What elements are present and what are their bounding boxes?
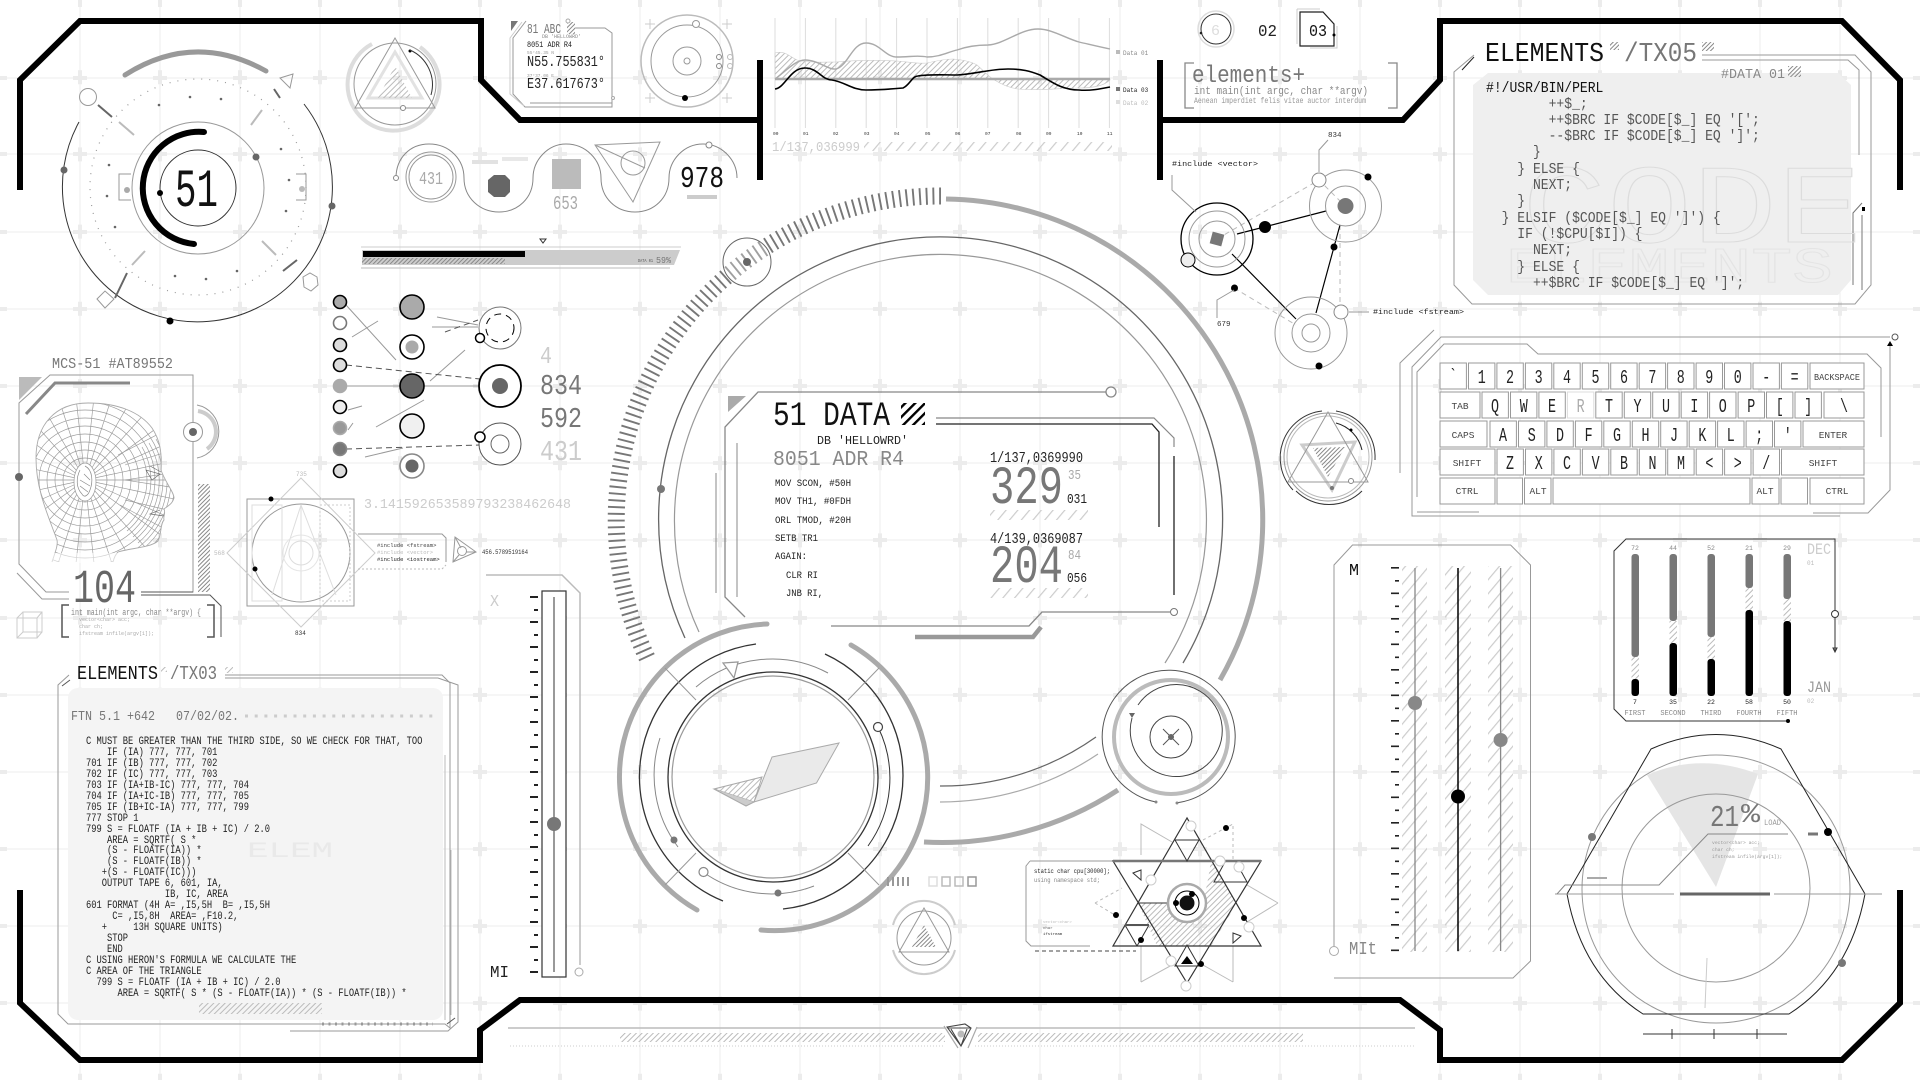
keys row 4: SHIFT bbox=[1809, 458, 1838, 469]
keys row 1 bbox=[1440, 363, 1864, 389]
perl listing: --$BRC IF $CODE[$_] EQ ']'; bbox=[1486, 128, 1760, 145]
step counter circles: 03 bbox=[1309, 23, 1327, 42]
slider panel M to MIt bbox=[1330, 545, 1530, 978]
code panel TX05: #DATA 01 bbox=[1721, 67, 1785, 83]
load value: 21 bbox=[1710, 801, 1739, 836]
keys row 5: CTRL bbox=[1826, 486, 1849, 497]
code listing: +(S - FLOATF(IC))) bbox=[86, 866, 196, 878]
head scan panel: int main(int argc, char **argv) { bbox=[71, 608, 201, 618]
heading TX05: ELEMENTS bbox=[1485, 40, 1604, 70]
coordinates box: 55°45.35 N bbox=[527, 50, 554, 56]
bar chart DEC to JAN: FIRST bbox=[1624, 710, 1646, 718]
value 431: 431 bbox=[419, 170, 443, 190]
code note box: char bbox=[1043, 926, 1053, 931]
code listing: C USING HERON'S FORMULA WE CALCULATE THE bbox=[86, 954, 296, 966]
bar chart DEC to JAN: 72 bbox=[1631, 545, 1639, 552]
triangle icon centre right bbox=[1280, 411, 1375, 505]
keyboard bbox=[1400, 330, 1898, 516]
slider panel M to MIt: MIt bbox=[1349, 940, 1377, 960]
network diagram bbox=[1172, 132, 1465, 370]
code note box: ifstream bbox=[1043, 932, 1063, 937]
keys row 3: F bbox=[1585, 425, 1593, 447]
keys row 3: K bbox=[1698, 425, 1707, 447]
step counter circles bbox=[1198, 9, 1337, 48]
network diagram: 679 bbox=[1217, 321, 1231, 329]
code listing: IF (IA) 777, 777, 701 bbox=[86, 746, 217, 758]
code panel TX03 bbox=[58, 663, 458, 1031]
coordinates box: DB 'HELLOWRD' bbox=[542, 34, 581, 40]
code listing: + 13H SQUARE UNITS) bbox=[86, 921, 223, 933]
keys row 2: I bbox=[1690, 396, 1698, 418]
compass square schematic: 834 bbox=[295, 630, 306, 637]
bar chart DEC to JAN: 35 bbox=[1669, 699, 1677, 706]
axis labels: 09 bbox=[1046, 131, 1052, 137]
keys row 2: O bbox=[1719, 396, 1727, 418]
perl listing: ++$BRC IF $CODE[$_] EQ '['; bbox=[1486, 112, 1760, 129]
readout numbers: 4 bbox=[540, 344, 552, 371]
keys row 2: R bbox=[1577, 396, 1585, 418]
thick frame: top left bbox=[20, 21, 760, 190]
bar chart DEC to JAN: 7 bbox=[1633, 699, 1637, 706]
code listing: 777 STOP 1 bbox=[86, 812, 139, 824]
perl listing: NEXT; bbox=[1486, 177, 1572, 194]
progress bar 59% bbox=[361, 239, 681, 268]
axis labels: 05 bbox=[925, 131, 931, 137]
keys row 4: SHIFT bbox=[1453, 458, 1482, 469]
perl listing: } bbox=[1486, 193, 1525, 210]
code note box: using namespace std; bbox=[1034, 877, 1100, 884]
keys row 2: [ bbox=[1776, 396, 1784, 418]
keys row 3: A bbox=[1499, 425, 1507, 447]
keys row 4: C bbox=[1563, 453, 1571, 475]
keys row 1: 5 bbox=[1592, 367, 1600, 389]
keys row 3: J bbox=[1670, 425, 1678, 447]
coordinates box bbox=[510, 19, 614, 107]
keys row 3: ENTER bbox=[1819, 430, 1848, 441]
bottom centre rule with gem icon bbox=[508, 1024, 1415, 1048]
keys row 1: BACKSPACE bbox=[1814, 372, 1860, 383]
line chart: 1/137,036999 bbox=[772, 140, 860, 156]
keys row 4: M bbox=[1677, 453, 1685, 475]
heading TX03: ELEMENTS bbox=[77, 663, 158, 685]
perl listing bbox=[1486, 80, 1760, 292]
keys row 4: / bbox=[1762, 453, 1770, 475]
keys row 1: 9 bbox=[1705, 367, 1713, 389]
hatched area bbox=[775, 52, 1110, 90]
coordinates box: 81 ABC bbox=[527, 22, 561, 38]
series: data 01 bbox=[775, 29, 1110, 79]
triangle marker with value bbox=[453, 537, 528, 562]
keys row 2: W bbox=[1520, 396, 1528, 418]
elements+ caption bbox=[1185, 63, 1397, 108]
line chart bbox=[772, 18, 1149, 156]
readout 329: 1/137,0369990 bbox=[990, 450, 1083, 467]
bar chart DEC to JAN: 01 bbox=[1807, 560, 1815, 567]
keys row 2 bbox=[1440, 392, 1864, 418]
perl listing: } ELSIF ($CODE[$_] EQ ']') { bbox=[1486, 210, 1721, 227]
slider panel M to MIt: M bbox=[1349, 562, 1359, 581]
elements+ caption: Aenean imperdiet felis vitae auctor interdum bbox=[1194, 97, 1366, 106]
bar chart DEC to JAN: 29 bbox=[1783, 545, 1791, 552]
keys row 2: U bbox=[1662, 396, 1670, 418]
readout 329: 35 bbox=[1068, 468, 1081, 484]
perl listing: } ELSE { bbox=[1486, 161, 1580, 178]
thick frame: top right bbox=[1160, 21, 1900, 190]
icon: wireframe head bbox=[36, 402, 174, 563]
keys row 1: 2 bbox=[1506, 367, 1514, 389]
keys row 2: E bbox=[1548, 396, 1556, 418]
keys row 1: - bbox=[1762, 367, 1770, 389]
code listing: 701 IF (IB) 777, 777, 702 bbox=[86, 757, 217, 769]
elements+ caption: int main(int argc, char **argv) bbox=[1194, 86, 1368, 98]
bar chart DEC to JAN: SECOND bbox=[1660, 710, 1686, 718]
step counter circles: 02 bbox=[1258, 23, 1277, 42]
keys row 4: B bbox=[1620, 453, 1628, 475]
code listing: OUTPUT TAPE 6, 601, IA, bbox=[86, 877, 223, 889]
central data panel: 8051 ADR R4 bbox=[773, 449, 904, 472]
radar load gauge: ifstream infile(argv[1]); bbox=[1712, 854, 1782, 860]
vertical slider X to MI: MI bbox=[490, 964, 509, 983]
keys row 3: ' bbox=[1784, 425, 1792, 447]
triangle marker with value: 456.5789519164 bbox=[482, 549, 528, 556]
head scan panel: ifstream infile(argv[1]); bbox=[79, 631, 154, 637]
triangle icon lower centre bbox=[893, 901, 955, 974]
step counter circles: 6 bbox=[1211, 23, 1220, 40]
keys row 2: ] bbox=[1804, 396, 1812, 418]
assembly listing: ORL TMOD, #20H bbox=[775, 515, 851, 527]
include box: #include <fstream> bbox=[377, 542, 436, 549]
code listing: C MUST BE GREATER THAN THE THIRD SIDE, SO WE CHECK FOR THAT, TOO bbox=[86, 735, 422, 747]
axis labels: 03 bbox=[864, 131, 870, 137]
code listing bbox=[86, 735, 422, 999]
triangle in circle icon bbox=[348, 38, 440, 131]
bar chart DEC to JAN: 58 bbox=[1745, 699, 1753, 706]
keys row 2: T bbox=[1605, 396, 1613, 418]
bars bbox=[1632, 554, 1791, 696]
keys row 5: ALT bbox=[1529, 486, 1547, 497]
keys row 2: TAB bbox=[1451, 401, 1469, 412]
assembly listing: CLR RI bbox=[786, 570, 818, 582]
keys row 1: 4 bbox=[1563, 367, 1571, 389]
large central ring bbox=[616, 196, 1263, 843]
compass square schematic bbox=[214, 471, 375, 637]
legend: Data 03 bbox=[1123, 87, 1149, 94]
keys row 4: X bbox=[1535, 453, 1543, 475]
central data panel bbox=[716, 387, 1178, 637]
assembly listing bbox=[775, 478, 851, 600]
ghost label: ELEM bbox=[247, 839, 333, 864]
hexagram emblem bbox=[1095, 818, 1278, 991]
bar chart DEC to JAN: FOURTH bbox=[1736, 710, 1762, 718]
bar chart DEC to JAN: 21 bbox=[1745, 545, 1753, 552]
head scan panel bbox=[0, 351, 221, 638]
readout 204: 84 bbox=[1068, 548, 1081, 564]
keys row 4: N bbox=[1648, 453, 1656, 475]
code listing: 702 IF (IC) 777, 777, 703 bbox=[86, 768, 217, 780]
assembly listing: AGAIN: bbox=[775, 551, 807, 563]
keys row 5: ALT bbox=[1756, 486, 1774, 497]
keys row 3: CAPS bbox=[1452, 430, 1475, 441]
radial dial with 51 bbox=[60, 52, 336, 324]
perl listing: #!/USR/BIN/PERL bbox=[1486, 80, 1603, 97]
code listing: C= ,I5,8H AREA= ,F10.2, bbox=[86, 910, 238, 922]
keys row 3 bbox=[1440, 421, 1864, 447]
axis labels: 11 bbox=[1107, 131, 1113, 137]
readout 204: 056 bbox=[1067, 571, 1087, 587]
axis labels: 10 bbox=[1077, 131, 1083, 137]
code listing: AREA = SQRTF( S * bbox=[86, 834, 196, 846]
assembly listing: MOV TH1, #0FDH bbox=[775, 496, 851, 508]
readout numbers: 431 bbox=[540, 436, 582, 469]
code panel TX03: /TX03 bbox=[170, 663, 217, 685]
thick frame: bottom bbox=[20, 890, 1900, 1060]
axis labels: 06 bbox=[955, 131, 961, 137]
small status squares bbox=[888, 877, 976, 886]
code listing: 799 S = FLOATF (IA + IB + IC) / 2.0 bbox=[86, 823, 270, 835]
code listing: C AREA OF THE TRIANGLE bbox=[86, 965, 202, 977]
legend bbox=[1116, 50, 1149, 107]
keys row 1: 3 bbox=[1535, 367, 1543, 389]
central data panel: DB 'HELLOWRD' bbox=[817, 434, 908, 448]
code listing: 703 IF (IA+IB-IC) 777, 777, 704 bbox=[86, 779, 249, 791]
dial value: 51 bbox=[175, 162, 218, 223]
assembly listing: SETB TR1 bbox=[775, 533, 818, 545]
code panel TX05: /TX05 bbox=[1624, 40, 1697, 70]
keys row 2: P bbox=[1747, 396, 1755, 418]
vertical slider X to MI: X bbox=[490, 593, 499, 612]
bar chart DEC to JAN: 52 bbox=[1707, 545, 1715, 552]
panel code label: MCS-51 #AT89552 bbox=[52, 356, 173, 373]
axis labels: 04 bbox=[894, 131, 900, 137]
keys row 2: Y bbox=[1634, 396, 1642, 418]
bar chart DEC to JAN: 02 bbox=[1807, 698, 1815, 705]
icon: laptop bbox=[714, 743, 839, 806]
head scan panel: char ch; bbox=[79, 624, 103, 630]
coordinates box: N55.755831° bbox=[527, 54, 605, 71]
keys row 2: \ bbox=[1840, 396, 1848, 418]
keys row 3: G bbox=[1613, 425, 1621, 447]
legend: Data 01 bbox=[1123, 50, 1149, 57]
keys row 3: H bbox=[1642, 425, 1650, 447]
ghost lettering: CODE bbox=[1522, 149, 1862, 276]
readout numbers: 834 bbox=[540, 370, 582, 403]
include box bbox=[358, 534, 446, 569]
code listing: (S - FLOATF(IA)) * bbox=[86, 844, 202, 856]
perl listing: ++$_; bbox=[1486, 96, 1588, 113]
keys row 3: D bbox=[1556, 425, 1564, 447]
code panel TX05: ELEMENTS bbox=[1506, 241, 1833, 298]
code listing: IB, IC, AREA bbox=[86, 888, 228, 900]
axis labels: 02 bbox=[833, 131, 839, 137]
readout 204: 4/139,0369087 bbox=[990, 531, 1083, 548]
keys row 1: 0 bbox=[1734, 367, 1742, 389]
keys row 1: 8 bbox=[1677, 367, 1685, 389]
network diagram: #include <fstream> bbox=[1373, 309, 1465, 317]
code note box: vector<char> bbox=[1043, 920, 1072, 925]
coordinates box: 37°37.06 E bbox=[527, 73, 554, 79]
series: data 03 bbox=[775, 68, 1110, 90]
value 653: 653 bbox=[553, 193, 578, 215]
radar load gauge: LOAD bbox=[1764, 819, 1781, 828]
code panel TX05 bbox=[1454, 40, 1871, 304]
readout 204: 204 bbox=[990, 538, 1063, 599]
radar load gauge: char ch; bbox=[1712, 847, 1735, 853]
network diagram: 834 bbox=[1328, 132, 1342, 140]
bar chart DEC to JAN: DEC bbox=[1807, 541, 1831, 559]
axis labels: 07 bbox=[985, 131, 991, 137]
keys row 1: ` bbox=[1449, 366, 1457, 388]
compass square schematic: 735 bbox=[296, 471, 307, 478]
big number 104: 104 bbox=[73, 564, 136, 617]
progress bar 59%: DATA 01 bbox=[638, 258, 653, 264]
coordinates box: 8051 ADR R4 bbox=[527, 40, 572, 50]
keys row 2: Q bbox=[1491, 396, 1499, 418]
concentric target icon bbox=[641, 15, 733, 107]
radar load gauge: vector<char> acc; bbox=[1712, 840, 1760, 846]
bar chart DEC to JAN: JAN bbox=[1807, 679, 1831, 697]
vertical slider X to MI bbox=[486, 575, 583, 983]
axis labels: 01 bbox=[803, 131, 809, 137]
keys row 3: S bbox=[1528, 425, 1536, 447]
target ring right bbox=[1102, 670, 1235, 804]
bar chart DEC to JAN bbox=[1614, 539, 1838, 723]
code panel TX03: FTN 5.1 +642 07/02/02. bbox=[71, 709, 239, 725]
keys row 4: < bbox=[1705, 453, 1713, 475]
network diagram: #include <vector> bbox=[1172, 161, 1259, 169]
legend: Data 02 bbox=[1123, 100, 1149, 107]
code note box: static char cpu[30000]; bbox=[1034, 868, 1110, 875]
perl listing: } ELSE { bbox=[1486, 259, 1580, 276]
keys row 4 bbox=[1440, 449, 1864, 475]
code note box bbox=[1026, 861, 1136, 951]
code listing: 601 FORMAT (4H A= ,I5,5H B= ,I5,5H bbox=[86, 899, 270, 911]
perl listing: NEXT; bbox=[1486, 242, 1572, 259]
bar chart DEC to JAN: FIFTH bbox=[1776, 710, 1798, 718]
wave track with icons bbox=[394, 142, 737, 215]
laptop dial bbox=[619, 624, 928, 931]
keys row 5: CTRL bbox=[1456, 486, 1479, 497]
code listing: STOP bbox=[86, 932, 128, 944]
axis labels: 00 bbox=[773, 131, 779, 137]
keys row 3: ; bbox=[1755, 425, 1763, 447]
include box: #include <iostream> bbox=[377, 556, 440, 563]
bar chart DEC to JAN: 22 bbox=[1707, 699, 1715, 706]
code listing: 799 S = FLOATF (IA + IB + IC) / 2.0 bbox=[86, 976, 281, 988]
progress bar 59%: 59% bbox=[656, 256, 672, 266]
readout numbers: 592 bbox=[540, 403, 582, 436]
bar chart DEC to JAN: THIRD bbox=[1700, 710, 1722, 718]
perl listing: ++$BRC IF $CODE[$_] EQ ']'; bbox=[1486, 275, 1744, 292]
code listing: 705 IF (IB+IC-IA) 777, 777, 799 bbox=[86, 801, 249, 813]
keys row 4: V bbox=[1592, 453, 1600, 475]
perl listing: } bbox=[1486, 144, 1541, 161]
assembly listing: JNB RI, bbox=[786, 588, 823, 600]
keys row 3: L bbox=[1727, 425, 1735, 447]
assembly listing: MOV SCON, #50H bbox=[775, 478, 851, 490]
value 978: 978 bbox=[680, 162, 724, 197]
include box: #include <vector> bbox=[377, 549, 433, 556]
bar chart DEC to JAN: 50 bbox=[1783, 699, 1791, 706]
keys row 4: Z bbox=[1506, 453, 1514, 475]
keys row 1: 6 bbox=[1620, 367, 1628, 389]
elements+ caption: elements+ bbox=[1192, 63, 1305, 90]
keys row 4: > bbox=[1734, 453, 1742, 475]
readout numbers bbox=[540, 344, 582, 469]
pi digits: 3.141592653589793238462648 bbox=[364, 497, 571, 513]
head scan panel: vector<char> acc; bbox=[79, 617, 130, 623]
keys row 5 bbox=[1440, 478, 1864, 504]
code listing: 704 IF (IA+IC-IB) 777, 777, 705 bbox=[86, 790, 249, 802]
perl listing: IF (!$CPU[$I]) { bbox=[1486, 226, 1642, 243]
code listing: AREA = SQRTF( S * (S - FLOATF(IA)) * (S - FLOATF(IB)) * bbox=[86, 987, 407, 999]
node graph bbox=[334, 295, 582, 478]
bar chart DEC to JAN: 44 bbox=[1669, 545, 1677, 552]
readout 329: 031 bbox=[1067, 492, 1087, 508]
code listing: END bbox=[86, 943, 123, 955]
axis labels bbox=[773, 131, 1113, 137]
heading 51 DATA: 51 DATA bbox=[773, 398, 890, 436]
code listing: (S - FLOATF(IB)) * bbox=[86, 855, 202, 867]
keys row 1: 1 bbox=[1478, 367, 1486, 389]
radar load gauge bbox=[1555, 734, 1882, 1039]
readout 329: 329 bbox=[990, 459, 1063, 520]
compass square schematic: 568 bbox=[214, 550, 225, 557]
keys row 1: 7 bbox=[1648, 367, 1656, 389]
axis labels: 08 bbox=[1016, 131, 1022, 137]
radar load gauge: % bbox=[1741, 801, 1761, 831]
coordinates box: E37.617673° bbox=[527, 76, 605, 93]
keys row 1: = bbox=[1791, 367, 1799, 389]
